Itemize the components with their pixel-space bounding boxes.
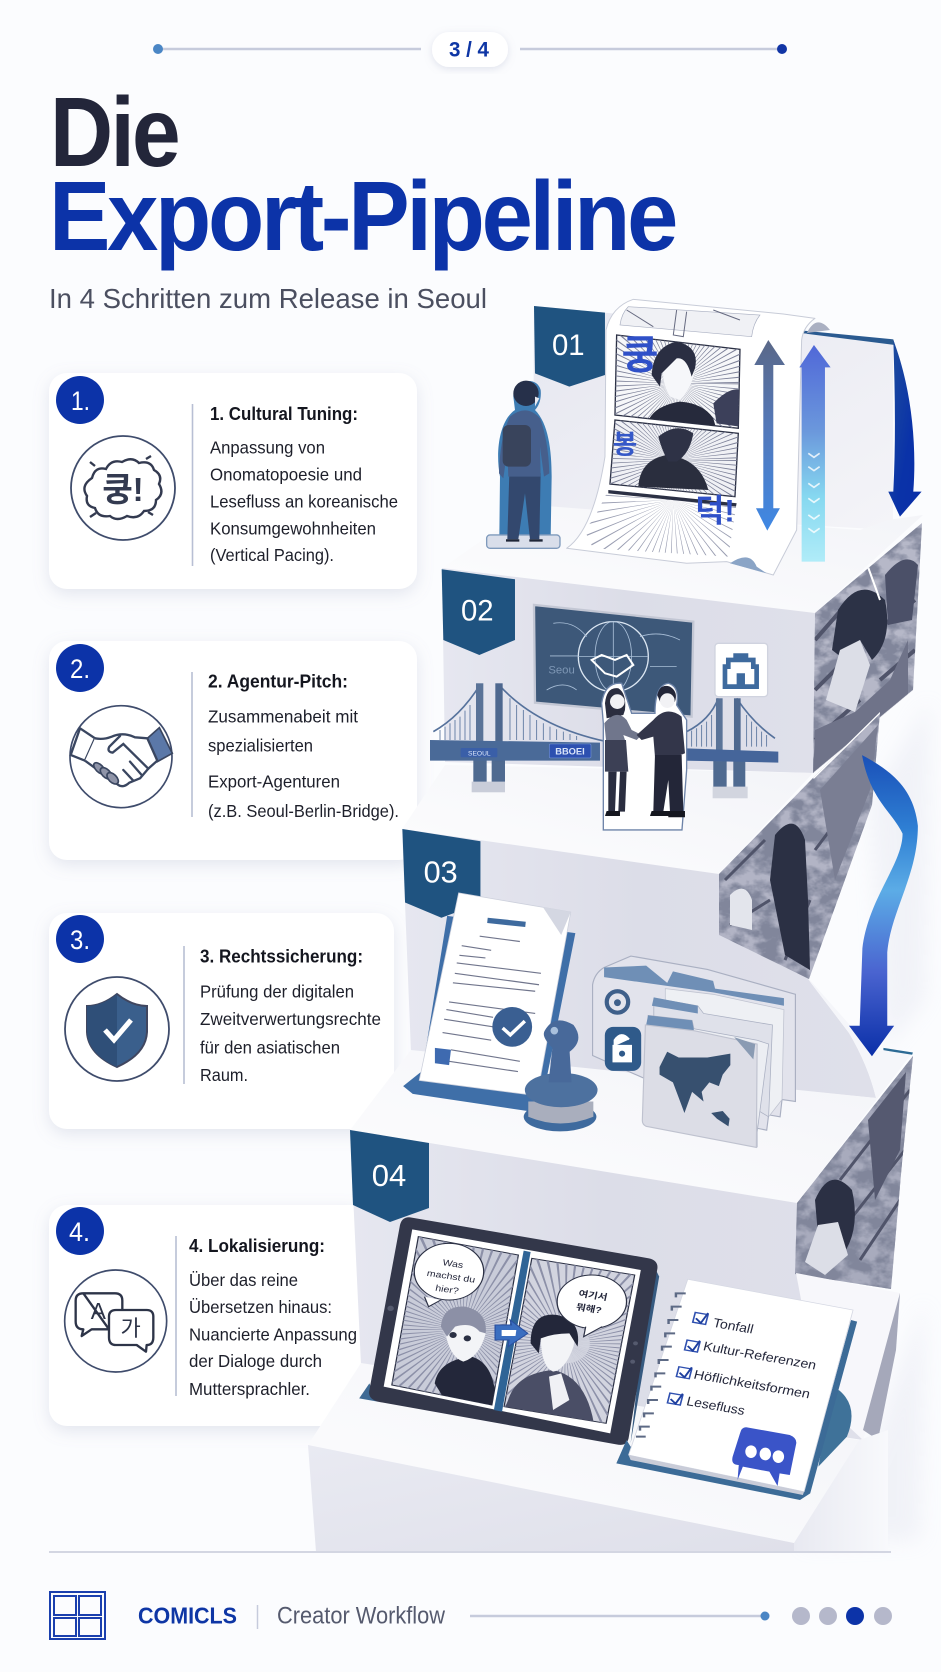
manga panel 3: 덕! [695, 493, 735, 529]
arrow [495, 1320, 528, 1347]
icon: onomatopoeia burst [71, 436, 175, 540]
checklist [685, 1315, 818, 1418]
ribbon 04 [350, 1130, 429, 1222]
subtitle: In 4 Schritten zum Release in Seoul [49, 283, 487, 314]
standee figure [487, 381, 560, 548]
step 3 wall [402, 829, 876, 1098]
manga panel 2 [610, 417, 738, 503]
manga panel 1: 쿵 [622, 333, 658, 377]
front folder [648, 1015, 769, 1147]
soft shadows [800, 700, 930, 1545]
blue rim [883, 1048, 913, 1055]
right panel: 여기서 [577, 1287, 609, 1303]
folder stack [593, 956, 795, 1147]
card text 3: 3. Rechtssicherung: [200, 946, 363, 966]
rubber stamp [524, 1020, 598, 1131]
card text 2: Export-Agenturen [208, 772, 340, 792]
brand: COMICLS [138, 1602, 237, 1628]
step 1 manga side [813, 523, 922, 773]
step 1 floor [442, 505, 923, 613]
staircase [308, 306, 930, 1552]
card text 2: (z.B. Seoul-Berlin-Bridge). [208, 801, 399, 821]
icon: handshake [70, 706, 172, 808]
checklist: Höflichkeitsformen [692, 1367, 812, 1401]
step 4 front face [308, 1445, 794, 1552]
badge 1: 1. [71, 386, 90, 416]
left panel: Was [442, 1258, 464, 1271]
wall rim [803, 331, 895, 345]
tablet [359, 1217, 659, 1445]
notebook [616, 1279, 857, 1500]
card 2 [49, 641, 417, 860]
step 2 manga side [719, 712, 880, 979]
suspension bridge: BBOEI [555, 747, 585, 757]
divider [191, 672, 193, 817]
card text 1: (Vertical Pacing). [210, 545, 334, 565]
right panel: 뭐해? [575, 1301, 603, 1316]
card text 3 [200, 946, 381, 1085]
progress header [153, 32, 787, 67]
card text 4: Nuancierte Anpassung [189, 1324, 357, 1344]
card text 1: Anpassung von [210, 438, 325, 458]
drop arrow to step 2 [888, 340, 922, 517]
icon: translation bubbles [65, 1270, 167, 1372]
divider [175, 1236, 177, 1396]
manga panel 2: 봉 [613, 429, 637, 459]
chat bubble [732, 1427, 796, 1486]
step 4 right face [794, 1430, 888, 1552]
badge 4: 4. [69, 1217, 90, 1247]
step 2 wall [442, 568, 815, 773]
rising arrow [799, 345, 831, 562]
badge 3: 3. [70, 925, 90, 955]
badge 1 [56, 376, 104, 424]
card text 4: Muttersprachler. [189, 1379, 310, 1399]
left panel: hier? [434, 1284, 460, 1297]
strategy board [534, 605, 693, 717]
manga panel 1 [615, 333, 740, 430]
icon: translation bubbles: 가 [121, 1316, 141, 1341]
standee: handshake figures [602, 683, 687, 830]
title: Export-Pipeline [49, 161, 676, 271]
step 4 wall [350, 1130, 863, 1440]
ribbon 01: 01 [552, 329, 585, 362]
icon: translation bubbles: A [91, 1298, 107, 1324]
card text 3: für den asiatischen [200, 1038, 340, 1058]
pagination dots [792, 1607, 892, 1625]
logo [50, 1592, 105, 1639]
ribbon 02 [442, 569, 515, 655]
step 4 back panel [796, 1273, 900, 1440]
card text 1: Konsumgewohnheiten [210, 518, 376, 538]
step 1 back wall [533, 306, 893, 530]
step 3 objects [402, 829, 913, 1147]
badge 2: 2. [70, 654, 90, 684]
divider [192, 404, 194, 566]
title [49, 77, 676, 271]
checklist: Tonfall [712, 1315, 755, 1336]
divider [183, 946, 185, 1084]
left panel [392, 1237, 518, 1407]
card text 3: Prüfung der digitalen [200, 982, 354, 1002]
card text 1: Onomatopoesie und [210, 464, 362, 484]
card text 1: Lesefluss an koreanische [210, 492, 398, 512]
footer [50, 1592, 892, 1639]
card text 4: Übersetzen hinaus: [189, 1297, 332, 1317]
double arrow [754, 340, 785, 531]
strategy board: Seou [548, 664, 575, 676]
card text 2 [208, 670, 399, 821]
icon: onomatopoeia burst: 쿵! [102, 471, 144, 508]
badge 3 [56, 915, 104, 963]
contract on clipboard [403, 893, 575, 1111]
title: Die [50, 77, 178, 187]
paper roll [567, 299, 830, 575]
card 3 [49, 913, 394, 1129]
footer rule [49, 1551, 891, 1553]
step 2 floor [402, 765, 813, 874]
manga panel 3 [586, 490, 737, 556]
step 1 objects [487, 299, 922, 575]
right panel [504, 1258, 635, 1423]
icon: shield [65, 977, 169, 1081]
card text 3: Raum. [200, 1065, 248, 1085]
badge 2 [56, 644, 104, 692]
card 4 [49, 1205, 369, 1426]
checklist: Lesefluss [685, 1394, 747, 1418]
map of Asia [660, 1052, 730, 1113]
card text 4 [189, 1235, 357, 1399]
curved arrow to step 3 [849, 755, 918, 1056]
ribbon 03 [402, 829, 480, 918]
card text 1: 1. Cultural Tuning: [210, 403, 358, 424]
card 1 [49, 373, 417, 589]
checklist: Kultur-Referenzen [702, 1339, 818, 1372]
badge 4 [56, 1207, 104, 1255]
suspension bridge [430, 683, 778, 798]
ribbon 01 [534, 306, 605, 387]
step 4 slice [863, 1293, 900, 1440]
spiral binding [636, 1293, 686, 1437]
back folders [593, 956, 795, 1130]
ribbon 03: 03 [424, 856, 458, 890]
step 4 objects [359, 1217, 857, 1500]
card text 4: der Dialoge durch [189, 1351, 322, 1371]
card text 4: 4. Lokalisierung: [189, 1235, 325, 1256]
tagline: Creator Workflow [277, 1602, 446, 1630]
progress header: 3 / 4 [449, 38, 489, 62]
ribbon 02: 02 [461, 595, 494, 628]
card text 1 [210, 403, 398, 565]
building icon card [715, 643, 768, 697]
panel divider [494, 1251, 531, 1412]
step 3 floor [350, 1050, 913, 1203]
card text 3: Zweitverwertungsrechte [200, 1009, 381, 1029]
ribbon 04: 04 [372, 1158, 406, 1193]
step 2 objects [430, 569, 778, 830]
suspension bridge: SEOUL [468, 750, 491, 757]
left panel: machst du [426, 1269, 476, 1285]
card text 2: 2. Agentur-Pitch: [208, 670, 348, 692]
card text 4: Über das reine [189, 1270, 298, 1290]
step 3 manga side [795, 1056, 913, 1289]
card text 2: spezialisierten [208, 736, 313, 756]
step 4 floor [308, 1363, 859, 1543]
card text 2: Zusammenabeit mit [208, 706, 358, 726]
